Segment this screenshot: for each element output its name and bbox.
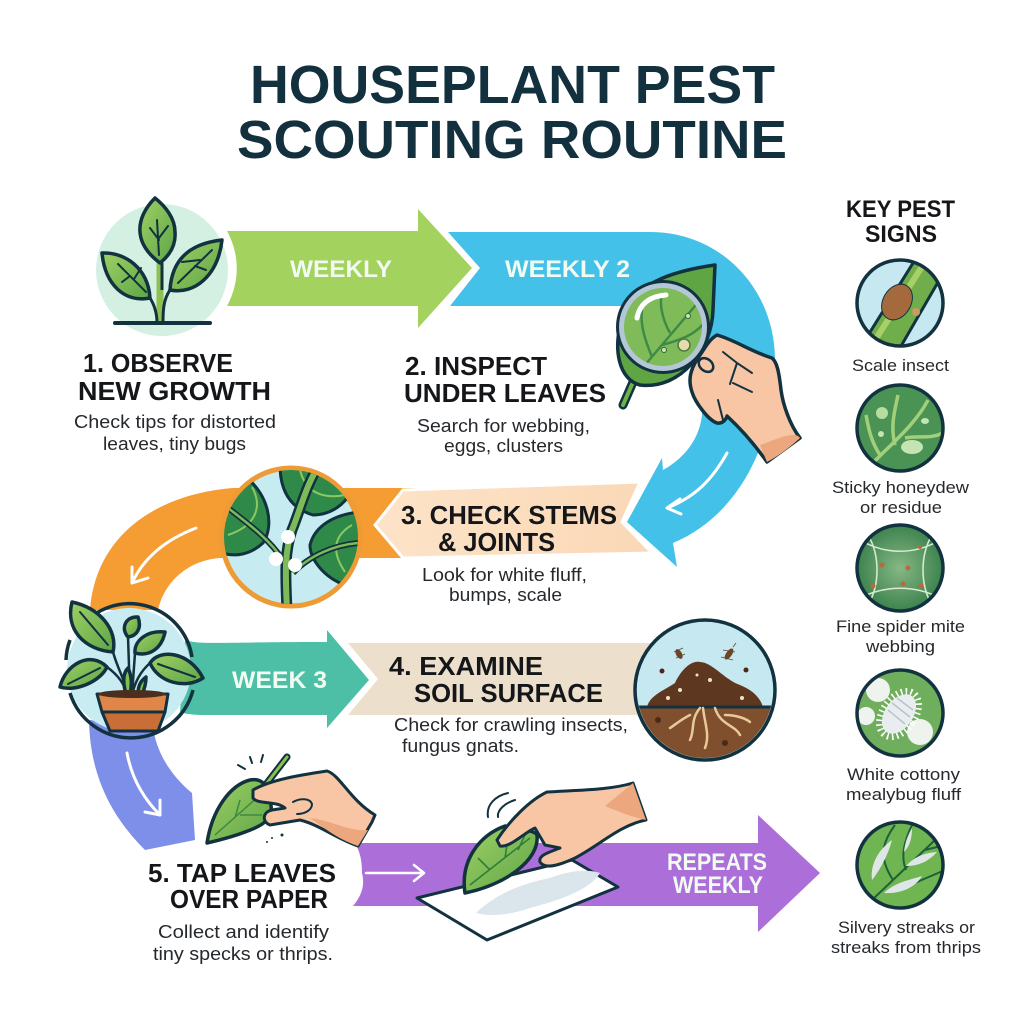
icon: potted plant	[60, 602, 203, 738]
text: step 1: 1. OBSERVE	[83, 348, 233, 378]
text: step 2: UNDER LEAVES	[404, 378, 606, 408]
sign: spider mite webbing: Fine spider mite	[836, 617, 965, 636]
heading: key pest signs: SIGNS	[865, 221, 937, 248]
sign: thrips silvery streaks: Silvery streaks or	[838, 918, 975, 937]
banner: step 4: 4. EXAMINE	[389, 651, 543, 681]
icon: soil cross-section	[630, 620, 780, 767]
sign: scale insect: Scale insect	[852, 356, 949, 375]
text: step 1	[74, 348, 276, 454]
text: step 2: 2. INSPECT	[405, 351, 547, 381]
title: HOUSEPLANT PEST	[250, 55, 775, 115]
arrow: periwinkle curved	[89, 720, 195, 850]
sign: sticky honeydew: Sticky honeydew	[832, 478, 970, 497]
arrow: purple repeats weekly: REPEATS	[667, 849, 767, 876]
sign: spider mite webbing	[836, 525, 965, 656]
sign: mealybug fluff	[846, 670, 961, 804]
sign: sticky honeydew: or residue	[860, 498, 942, 517]
text: step 3 description: bumps, scale	[449, 585, 562, 605]
text: step 1: leaves, tiny bugs	[103, 434, 246, 454]
sign: scale insect	[852, 255, 949, 375]
arrow: blue curved weekly 2	[448, 232, 775, 567]
text: step 2: eggs, clusters	[444, 436, 563, 456]
sign: sticky honeydew	[832, 385, 970, 517]
arrow: purple repeats weekly: WEEKLY	[673, 872, 763, 899]
banner: step 4: SOIL SURFACE	[414, 678, 603, 708]
text: step 4 description	[394, 715, 628, 756]
text: step 1: Check tips for distorted	[74, 412, 276, 432]
text: step 2: Search for webbing,	[417, 416, 590, 436]
arrow: teal week 3	[180, 630, 369, 728]
text: step 5: Collect and identify	[158, 922, 329, 942]
text: step 5: OVER PAPER	[170, 884, 328, 914]
icon: paper with leaf and hand	[417, 783, 646, 940]
arrow: orange curved	[90, 488, 420, 610]
text: step 1: NEW GROWTH	[78, 376, 271, 406]
sign: mealybug fluff: White cottony	[847, 765, 961, 784]
sign: thrips silvery streaks: streaks from thrips	[831, 938, 981, 957]
icon: leaf tapped by hand	[207, 755, 375, 846]
title: SCOUTING ROUTINE	[237, 110, 787, 170]
banner: step 3 peach: & JOINTS	[438, 527, 555, 557]
heading: key pest signs: KEY PEST	[846, 196, 955, 223]
sign: mealybug fluff: mealybug fluff	[846, 785, 961, 804]
arrow: blue curved weekly 2: WEEKLY 2	[505, 256, 630, 283]
text: step 5: tiny specks or thrips.	[153, 944, 333, 964]
arrow: green weekly	[227, 209, 472, 328]
arrow: teal week 3: WEEK 3	[232, 667, 327, 694]
banner: step 3 peach	[375, 482, 652, 558]
text: step 3 description: Look for white fluff,	[422, 565, 587, 585]
icon: magnifier on leaf with hand	[616, 265, 800, 462]
banner: step 4	[348, 643, 650, 715]
heading: key pest signs	[846, 196, 955, 248]
banner: step 3 peach: 3. CHECK STEMS	[401, 500, 617, 530]
sign: thrips silvery streaks	[831, 822, 981, 957]
text: step 2	[404, 351, 606, 456]
arrow: purple repeats weekly	[353, 815, 820, 932]
text: step 5	[148, 858, 336, 964]
icon: seedling	[96, 198, 228, 336]
text: step 4 description: fungus gnats.	[402, 736, 519, 756]
text: step 3 description	[422, 565, 587, 605]
icon: stem joints with white fluff	[222, 460, 365, 610]
text: step 5: 5. TAP LEAVES	[148, 858, 336, 888]
arrow: green weekly: WEEKLY	[290, 256, 392, 283]
title	[237, 55, 787, 170]
sign: spider mite webbing: webbing	[865, 637, 935, 656]
text: step 4 description: Check for crawling insects,	[394, 715, 628, 735]
